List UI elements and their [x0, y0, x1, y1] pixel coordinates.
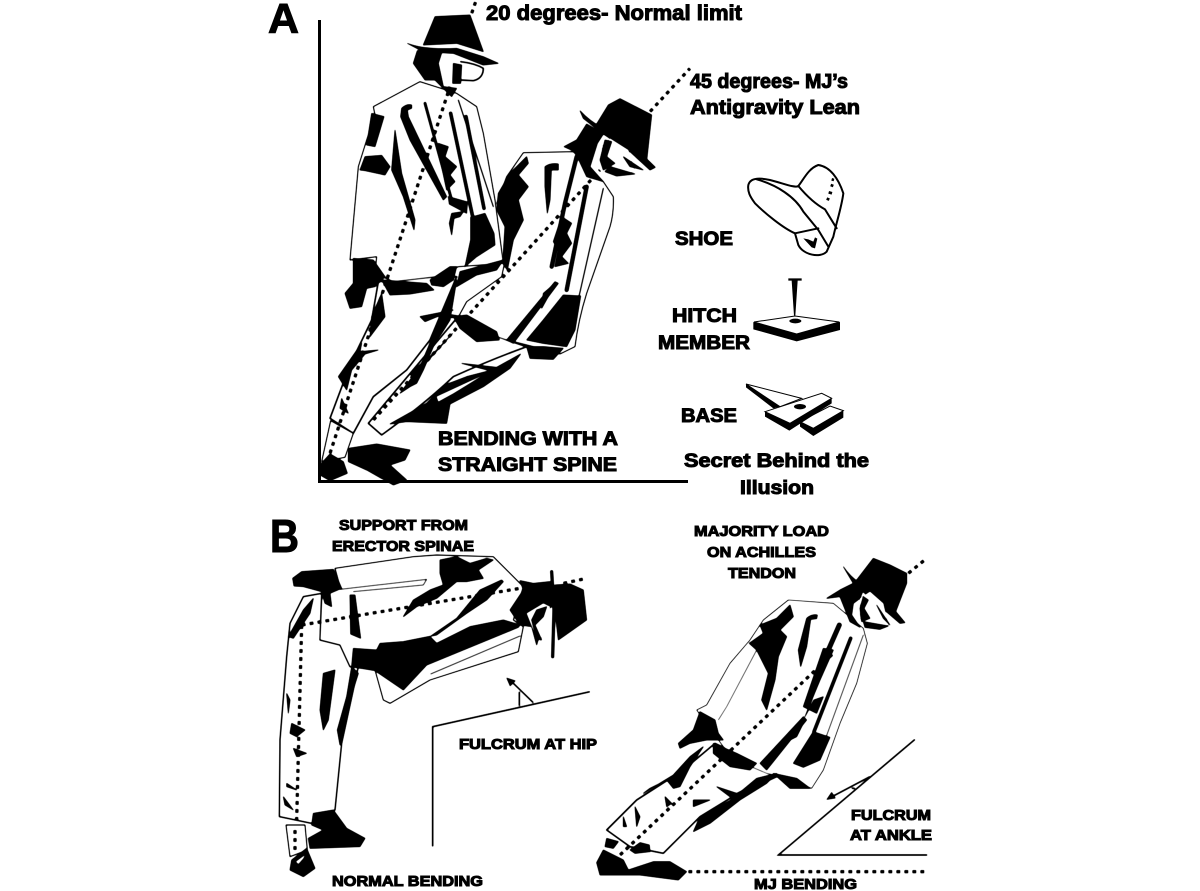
panel: B — [270, 510, 932, 891]
hand — [678, 712, 723, 748]
trousers — [368, 318, 527, 435]
hair and face — [564, 124, 603, 182]
trousers — [607, 743, 777, 853]
lower coat — [793, 732, 830, 767]
hair and face — [413, 51, 457, 97]
label: fulcrum at ankle — [850, 808, 932, 844]
jacket — [697, 600, 867, 788]
label: 45 degrees — [690, 71, 860, 119]
hand — [345, 258, 385, 308]
label: shoe: SHOE — [675, 229, 733, 250]
label: secret behind the illusion — [684, 451, 869, 499]
arrow: fulcrum at hip — [433, 692, 590, 847]
label: base: BASE — [681, 406, 737, 427]
hair and face — [827, 583, 863, 627]
label: bending with a straight spine — [438, 429, 618, 476]
label: majority load on achilles tendon — [694, 524, 829, 582]
label: hitch member: HITCH — [672, 306, 737, 327]
hand and arm folds — [293, 569, 342, 607]
figure: MJ bending — [597, 558, 927, 880]
trousers — [279, 593, 358, 823]
jacket — [457, 152, 613, 354]
shoes — [597, 850, 687, 880]
ankle — [286, 825, 307, 857]
shoes — [308, 810, 365, 848]
hat — [555, 584, 587, 640]
label: bending with a straight spine: BENDING WITH A — [438, 429, 618, 450]
label: 20 degrees: 20 degrees- Normal limit — [486, 2, 742, 25]
hat — [597, 99, 652, 161]
sleeve folds — [749, 605, 793, 710]
icon: base — [746, 384, 843, 436]
hat — [423, 15, 483, 52]
label: majority load on achilles tendon: ON ACHILLES — [707, 545, 816, 561]
panel: secret behind the illusion — [658, 165, 869, 499]
axes — [320, 20, 688, 482]
label: hitch member: MEMBER — [658, 333, 750, 354]
shoe — [320, 454, 347, 481]
figure: 20 degree normal limit — [320, 2, 503, 481]
figure: normal bending — [279, 555, 590, 877]
label: bending with a straight spine: STRAIGHT SPINE — [438, 455, 617, 476]
jacket — [350, 82, 503, 282]
icon: hitch member — [753, 278, 840, 341]
label: secret behind the illusion: Secret Behind the — [684, 451, 869, 472]
label: fulcrum at hip: FULCRUM AT HIP — [459, 737, 597, 753]
label: fulcrum at ankle: FULCRUM — [851, 808, 931, 824]
panel letter B: B — [270, 510, 299, 562]
label: secret behind the illusion: Illusion — [740, 478, 814, 499]
label: majority load on achilles tendon: TENDON — [728, 566, 796, 582]
hat — [857, 558, 907, 613]
arrow: fulcrum at ankle — [778, 739, 927, 855]
hair and face — [510, 581, 552, 645]
label: support from erector spinae — [332, 518, 474, 555]
label: 45 degrees: Antigravity Lean — [690, 97, 860, 119]
label: majority load on achilles tendon: MAJORITY LOAD — [694, 524, 829, 540]
label: fulcrum at ankle: AT ANKLE — [850, 828, 932, 844]
label: support from erector spinae: ERECTOR SPINAE — [332, 539, 474, 555]
label: normal bending: NORMAL BENDING — [332, 874, 483, 890]
label: 45 degrees: 45 degrees- MJ’s — [690, 71, 848, 93]
label: support from erector spinae: SUPPORT FROM — [339, 518, 468, 534]
label: hitch member — [658, 306, 750, 354]
jacket — [320, 555, 523, 703]
trousers and ankle — [330, 277, 457, 433]
figure: 45 degree lean — [348, 68, 690, 485]
trouser folds — [643, 747, 703, 793]
panel: A — [268, 0, 690, 485]
shoe — [348, 444, 410, 485]
icon: shoe — [748, 165, 843, 255]
